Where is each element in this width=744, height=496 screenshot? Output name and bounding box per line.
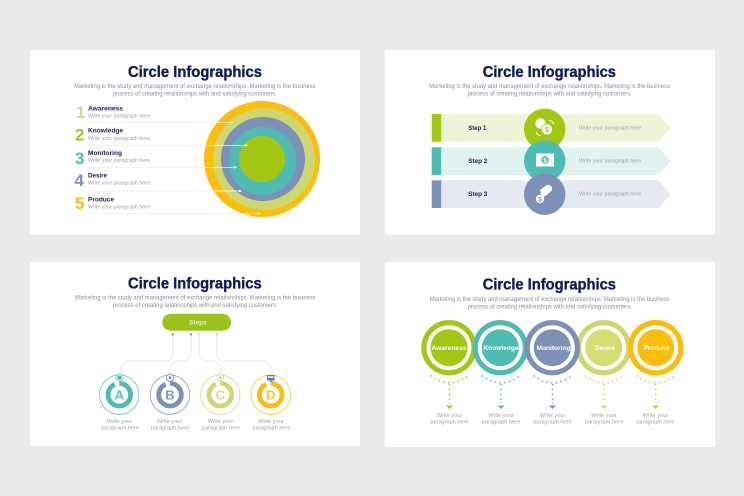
circle D: D — [266, 388, 275, 402]
title: Circle Infographics — [483, 64, 616, 81]
captions: paragraph here — [202, 426, 240, 432]
list item 1: Awareness: Write your paragraph here — [88, 114, 150, 120]
circle C: C — [216, 388, 226, 402]
subtitle — [74, 84, 316, 98]
dotted arrow: Produce — [636, 376, 675, 409]
list item 2: Knowledge: Knowledge — [88, 128, 123, 135]
circle B: B — [165, 388, 175, 402]
list item 2: Knowledge: 2 — [75, 126, 84, 145]
subtitle: process of creating relationships with and satisfying customers. — [468, 92, 632, 98]
step 1 arrow — [432, 114, 671, 142]
list item 1: Awareness: Awareness — [88, 106, 123, 113]
circle B — [150, 374, 190, 414]
subtitle: process of creating relationships with and satisfying customers. — [113, 92, 277, 98]
step 2 arrow: Step 2 — [468, 158, 488, 165]
list item 3: Monitoring — [75, 149, 150, 168]
circle A: A — [115, 388, 125, 402]
captions: Write your — [208, 419, 233, 425]
captions: Write your — [643, 413, 668, 419]
icon: coins — [524, 109, 565, 150]
captions: paragraph here — [151, 426, 189, 432]
circle: Monitoring — [525, 320, 580, 375]
list item 3: Monitoring: Write your paragraph here — [88, 158, 150, 164]
captions: paragraph here — [585, 420, 623, 426]
panel: circle row — [385, 262, 715, 447]
icon: hand with coin: $ — [538, 197, 542, 203]
circle A — [100, 374, 139, 414]
circle D — [251, 375, 290, 414]
captions: Write your — [488, 413, 514, 419]
panel: step arrows — [385, 50, 715, 234]
circle: Desire: Desire — [595, 345, 615, 352]
step 2 arrow: Write your paragraph here — [579, 158, 641, 164]
list item 4: Desire: Desire — [88, 173, 107, 180]
list item 3: Monitoring: Monitoring — [88, 150, 122, 157]
captions: Write your — [591, 413, 617, 419]
leader arrows — [88, 121, 261, 215]
subtitle: process of creating relationships with and satisfying customers. — [113, 303, 278, 309]
list item 1: Awareness — [76, 103, 150, 122]
title: Circle Infographics — [128, 64, 262, 81]
list item 5: Produce: 5 — [75, 194, 84, 213]
circle: Knowledge — [473, 320, 528, 375]
dotted arrow: Knowledge — [482, 376, 520, 409]
captions: paragraph here — [430, 420, 469, 426]
list item 5: Produce: Produce — [88, 197, 114, 204]
step 1 arrow: Write your paragraph here — [579, 125, 641, 131]
list item 2: Knowledge — [75, 126, 150, 145]
subtitle — [430, 297, 670, 310]
list item 4: Desire: 4 — [74, 171, 84, 190]
circle: Produce — [628, 320, 684, 376]
captions: paragraph here — [252, 426, 291, 432]
dotted arrow: Awareness — [430, 376, 468, 409]
steps button — [162, 314, 231, 331]
circle C — [201, 374, 240, 414]
captions: Write your — [157, 419, 182, 425]
circle: Awareness — [421, 320, 477, 375]
circle: Awareness: Awareness — [432, 345, 467, 352]
title: Circle Infographics — [128, 275, 262, 292]
panel: steps tree — [30, 262, 360, 446]
circle: Knowledge: Knowledge — [484, 345, 519, 352]
connector dots — [172, 333, 218, 336]
subtitle: Marketing is the study and management of exchange relationships. Marketing is the business — [74, 84, 316, 90]
captions — [430, 413, 675, 426]
subtitle: Marketing is the study and management of exchange relationships. Marketing is the business — [429, 84, 670, 90]
circle: Monitoring: Monitoring — [536, 345, 571, 352]
subtitle: Marketing is the study and management of exchange relationships. Marketing is the business — [75, 295, 316, 301]
list item 4: Desire: Write your paragraph here — [88, 181, 150, 187]
captions — [101, 419, 291, 432]
icon: hand with coin — [524, 174, 565, 215]
concentric circle chart — [204, 101, 320, 217]
circle: Produce: Produce — [644, 345, 670, 352]
icon: banknote — [524, 140, 565, 182]
step 1 arrow: Step 1 — [468, 125, 487, 132]
connectors — [121, 336, 271, 372]
subtitle: process of creating relationships with and satisfying customers. — [468, 304, 632, 310]
dotted arrow: Monitoring — [534, 376, 572, 409]
list item 4: Desire — [74, 171, 150, 190]
icon: coins: $ — [545, 125, 550, 134]
title: Circle Infographics — [483, 276, 616, 294]
captions: Write your — [540, 413, 565, 419]
step 3 arrow: Write your paragraph here — [579, 191, 641, 197]
icon: banknote: $ — [543, 157, 547, 164]
subtitle — [75, 295, 316, 309]
subtitle — [429, 84, 670, 98]
list item 3: Monitoring: 3 — [75, 149, 84, 168]
captions: paragraph here — [636, 420, 675, 426]
step 3 arrow — [432, 180, 671, 208]
captions: paragraph here — [533, 420, 572, 426]
captions: paragraph here — [101, 426, 139, 432]
captions: Write your — [107, 419, 132, 425]
captions: Write your — [258, 419, 284, 425]
list item 1: Awareness: 1 — [76, 103, 85, 122]
panel: concentric circles — [30, 50, 360, 234]
dotted arrow: Desire — [585, 376, 623, 409]
list item 2: Knowledge: Write your paragraph here — [88, 136, 150, 142]
steps button: Steps — [189, 320, 207, 326]
circle: Desire — [576, 320, 631, 375]
step 2 arrow — [432, 147, 671, 175]
subtitle: Marketing is the study and management of exchange relationships. Marketing is the business — [430, 297, 670, 303]
list item 5: Produce — [75, 194, 150, 213]
step 3 arrow: Step 3 — [468, 191, 488, 198]
captions: Write your — [437, 413, 462, 419]
captions: paragraph here — [482, 420, 520, 426]
list item 5: Produce: Write your paragraph here — [88, 205, 150, 211]
